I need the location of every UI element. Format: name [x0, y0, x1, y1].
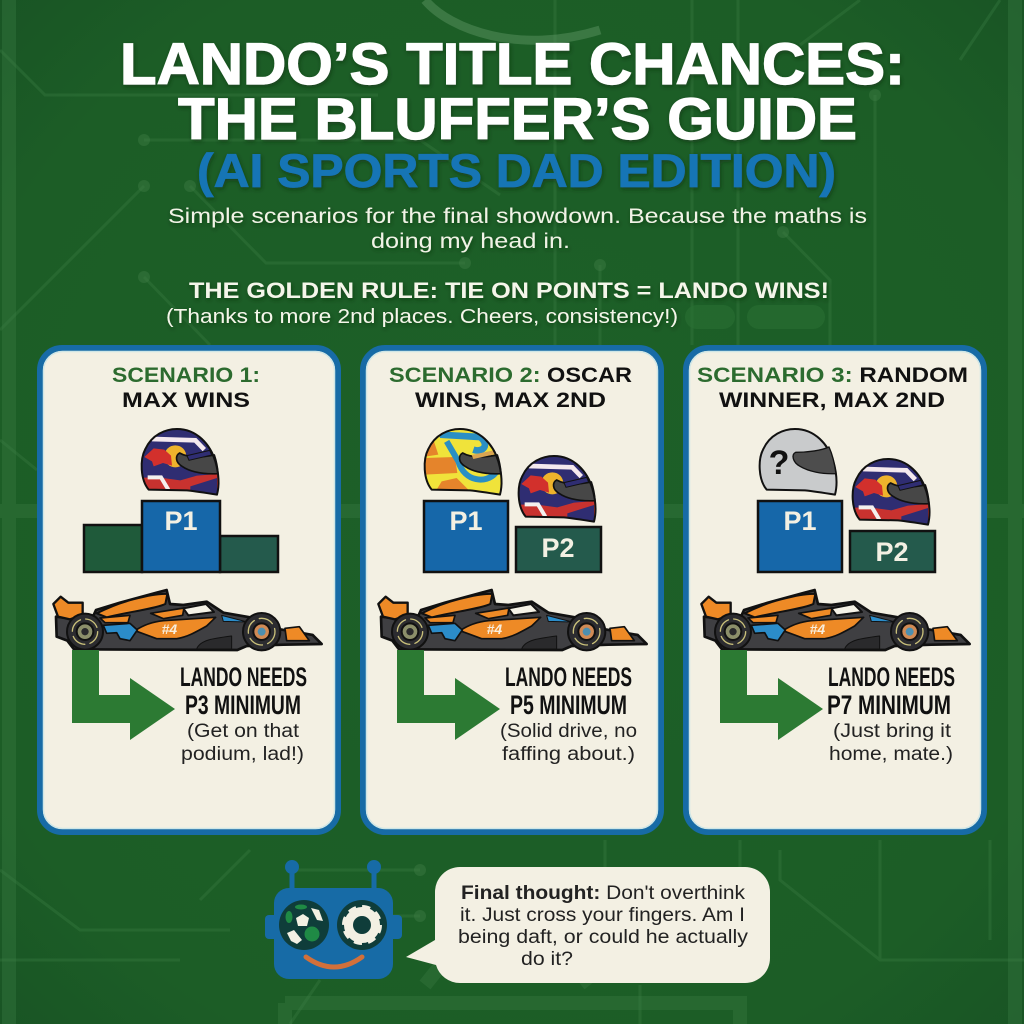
requirement text: P5 MINIMUM — [510, 690, 627, 720]
requirement text: LANDO NEEDS — [505, 662, 632, 692]
panel: scenario 3 — [686, 348, 984, 832]
requirement text: LANDO NEEDS — [180, 662, 307, 692]
requirement text: faffing about.) — [502, 744, 635, 765]
title — [120, 32, 905, 152]
podium — [424, 501, 601, 572]
intro text: Simple scenarios for the final showdown. Because the maths is — [168, 205, 867, 228]
requirement text — [827, 662, 955, 765]
requirement text: LANDO NEEDS — [828, 662, 955, 692]
requirement text — [500, 662, 637, 765]
requirement text: (Just bring it — [833, 721, 952, 742]
icon: mystery helmet — [760, 429, 837, 495]
title: THE BLUFFER’S GUIDE — [178, 87, 857, 152]
final thought text: it. Just cross your fingers. Am I — [460, 905, 745, 926]
requirement text: podium, lad!) — [181, 744, 304, 765]
subtitle: AI sports dad edition: (AI SPORTS DAD EDITION) — [197, 144, 836, 197]
heading: scenario 1: MAX WINS — [122, 389, 250, 412]
podium: P1 — [164, 506, 198, 536]
podium — [84, 501, 278, 572]
icon: McLaren car — [378, 590, 647, 650]
heading: scenario 1: SCENARIO 1: — [112, 364, 260, 387]
arrow — [72, 650, 175, 740]
title: LANDO’S TITLE CHANCES: — [120, 32, 905, 97]
icon: McLaren car: #4 — [162, 621, 177, 637]
icon: Max helmet — [516, 453, 599, 523]
requirement text — [180, 662, 307, 765]
icon: McLaren car — [53, 590, 322, 650]
heading: scenario 2 — [389, 364, 632, 412]
icon: McLaren car: #4 — [487, 621, 502, 637]
requirement text: (Solid drive, no — [500, 721, 637, 742]
heading: scenario 3: SCENARIO 3: RANDOM — [697, 364, 968, 387]
icon: Max helmet — [139, 426, 222, 496]
intro text — [168, 205, 867, 253]
arrow — [720, 650, 823, 740]
icon: McLaren car — [701, 590, 970, 650]
final thought text: being daft, or could he actually — [458, 927, 749, 948]
requirement text: P3 MINIMUM — [185, 690, 301, 720]
speech bubble — [406, 867, 770, 983]
icon: Max helmet — [850, 456, 933, 526]
heading: scenario 1 — [112, 364, 260, 412]
requirement text: home, mate.) — [829, 744, 953, 765]
panel: scenario 1 — [40, 348, 338, 832]
podium: P1 — [783, 506, 817, 536]
podium: P2 — [875, 537, 909, 567]
heading: scenario 3: WINNER, MAX 2ND — [719, 389, 945, 412]
icon: McLaren car: #4 — [810, 621, 825, 637]
golden rule: THE GOLDEN RULE: TIE ON POINTS = LANDO WINS! — [189, 278, 829, 303]
icon: Oscar helmet — [422, 426, 505, 496]
icon: mystery helmet: ? — [769, 444, 789, 482]
icon: robot mascot — [265, 860, 402, 979]
golden rule: (Thanks to more 2nd places. Cheers, consistency!) — [166, 306, 678, 328]
panel: scenario 2 — [363, 348, 661, 832]
intro text: doing my head in. — [371, 230, 570, 253]
heading: scenario 3 — [697, 364, 968, 412]
final thought text: do it? — [521, 949, 573, 970]
arrow — [397, 650, 500, 740]
podium: P2 — [541, 533, 575, 563]
heading: scenario 2: WINS, MAX 2ND — [415, 389, 606, 412]
heading: scenario 2: SCENARIO 2: OSCAR — [389, 364, 632, 387]
golden rule — [166, 278, 829, 328]
final thought text: Final thought: Don't overthink — [461, 883, 746, 904]
podium: P1 — [449, 506, 483, 536]
requirement text: (Get on that — [187, 721, 300, 742]
podium — [758, 501, 935, 572]
requirement text: P7 MINIMUM — [827, 690, 951, 720]
final thought text — [458, 883, 749, 970]
